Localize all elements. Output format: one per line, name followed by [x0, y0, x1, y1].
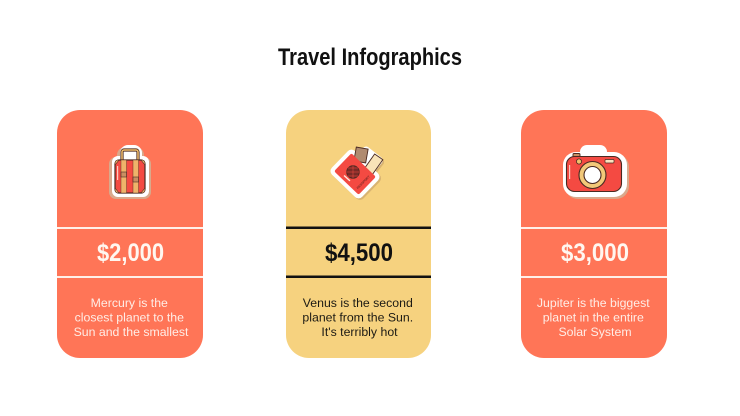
- card background: [521, 110, 667, 358]
- price: $3,000: [561, 239, 629, 267]
- divider lines: [286, 226, 431, 278]
- price: $2,000: [97, 239, 164, 267]
- icon: camera: [563, 145, 629, 199]
- panel: suitcase card: [57, 110, 203, 358]
- title: Travel Infographics: [278, 44, 462, 71]
- icon: passport: [328, 145, 386, 202]
- divider lines and price band: [57, 227, 203, 278]
- description: Venus is the second: [303, 296, 413, 310]
- passport label: PASSPORT: [356, 175, 371, 190]
- description: Solar System: [558, 325, 632, 339]
- description: Jupiter is the biggest: [537, 296, 650, 310]
- card background: [286, 110, 431, 358]
- description: Mercury is the: [91, 296, 168, 310]
- description: planet from the Sun.: [302, 310, 413, 324]
- description: It's terribly hot: [321, 325, 398, 339]
- divider lines: [521, 227, 667, 278]
- description: Sun and the smallest: [74, 325, 189, 339]
- panel: camera card: [521, 110, 667, 358]
- card background: [57, 110, 203, 358]
- panel: passport card: [286, 110, 431, 358]
- icon: suitcase: [109, 145, 151, 199]
- price: $4,500: [325, 239, 393, 267]
- description: closest planet to the: [75, 310, 184, 324]
- description: planet in the entire: [543, 310, 644, 324]
